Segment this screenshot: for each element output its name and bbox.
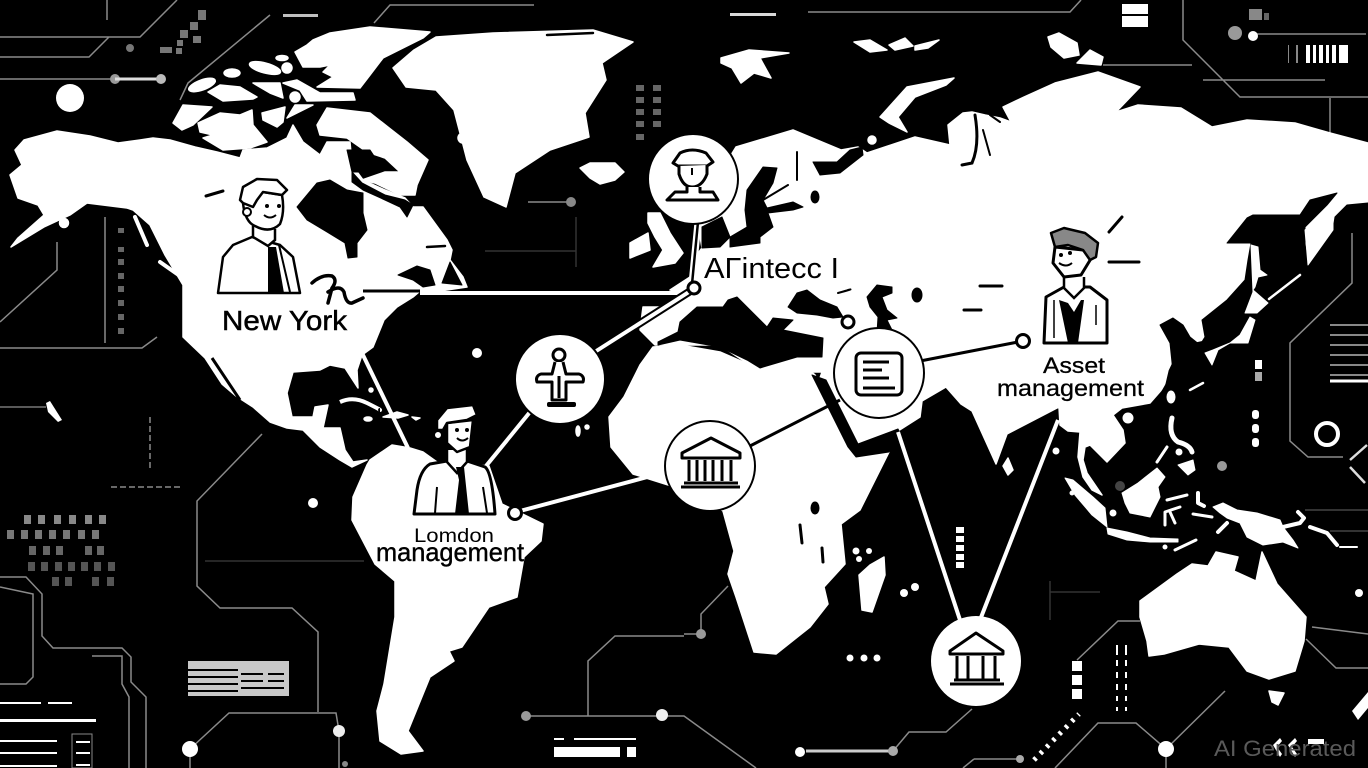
Baffin Island — [317, 108, 428, 195]
line Scale to London — [486, 412, 530, 466]
node rings — [508, 282, 1030, 520]
label: New York: New York — [222, 305, 348, 336]
Hudson Bay — [297, 180, 367, 258]
lines to bottom Temple — [898, 432, 960, 620]
right side circuit — [1115, 233, 1368, 531]
Africa — [609, 345, 889, 654]
label: AIntecc: AΓintecc I — [704, 253, 839, 285]
Mediterranean Sea — [658, 297, 823, 368]
Taiwan, Hainan and small islets — [1053, 391, 1182, 549]
icon: bank in circle (bottom) — [931, 616, 1021, 706]
map detail dashes — [206, 33, 1139, 562]
Arctic small islands — [60, 56, 468, 228]
decorative data blocks — [7, 10, 661, 586]
Black Sea — [788, 290, 843, 318]
seas and lakes — [212, 147, 1368, 457]
line top circle to Europe node — [692, 222, 698, 284]
data table block — [188, 661, 289, 696]
Gulf of St Lawrence — [398, 262, 462, 287]
Kuril chain — [1190, 275, 1300, 390]
Red Sea and Gulf of Aden — [812, 375, 900, 457]
label: London management: Lomdon — [414, 526, 494, 547]
Borneo — [1122, 468, 1165, 517]
Caribbean details — [340, 388, 589, 436]
line New York to Europe — [363, 290, 420, 292]
Baltic Sea — [730, 167, 803, 247]
line Temple to Document — [750, 400, 840, 446]
Ellesmere Island — [295, 27, 430, 88]
label: London management: management — [376, 537, 525, 567]
line New York to South America — [362, 353, 408, 448]
Gulf of California — [212, 358, 240, 400]
connection lines — [362, 222, 1058, 620]
East Asian and Southeast Asian islands — [1053, 205, 1357, 550]
island arcs — [1171, 418, 1192, 452]
line London to Temple — [520, 472, 666, 511]
Hudson Strait — [352, 172, 413, 217]
label: Asset management: management — [997, 375, 1145, 401]
Pacific coast islands — [135, 217, 180, 276]
watermark: AI Generated — [1214, 736, 1356, 761]
Foxe Basin — [347, 150, 380, 172]
White Sea — [813, 147, 863, 175]
Eurasia — [640, 72, 1368, 495]
Iceland — [580, 163, 624, 184]
person: London — [414, 405, 495, 514]
icon: document in circle — [834, 328, 924, 418]
Madagascar and other islands — [383, 412, 1013, 612]
Arctic archipelago — [173, 80, 355, 188]
South America — [352, 445, 543, 754]
Sumatra — [1065, 478, 1107, 527]
Greenland — [393, 30, 633, 207]
icon: signpost scale in circle — [515, 334, 605, 424]
Kamchatka — [1305, 205, 1333, 265]
Pacific Northeast sea, Sea of Japan and East China Sea — [1157, 193, 1368, 400]
UK and Ireland — [630, 213, 683, 267]
label: Asset management: Asset — [1043, 353, 1105, 378]
Caspian Sea — [867, 285, 897, 333]
icon: bank in circle (Africa) — [665, 421, 755, 511]
Mindanao — [1178, 460, 1195, 475]
line Document to Asia — [915, 342, 1018, 362]
Java — [1107, 528, 1178, 542]
Arctic Russian islands — [854, 33, 1103, 132]
label: Asset management — [997, 353, 1145, 401]
person: Asset management — [1044, 228, 1107, 343]
Aral Sea — [912, 288, 922, 302]
person: New York — [218, 179, 363, 303]
Australia — [1140, 552, 1306, 705]
Svalbard — [721, 50, 789, 83]
North America — [10, 125, 467, 467]
New Guinea — [1213, 503, 1298, 548]
North Sea — [702, 217, 730, 248]
line Europe to Scale — [590, 290, 692, 355]
icon: person in circle — [648, 134, 738, 224]
Sakhalin and Japan — [1205, 245, 1268, 365]
